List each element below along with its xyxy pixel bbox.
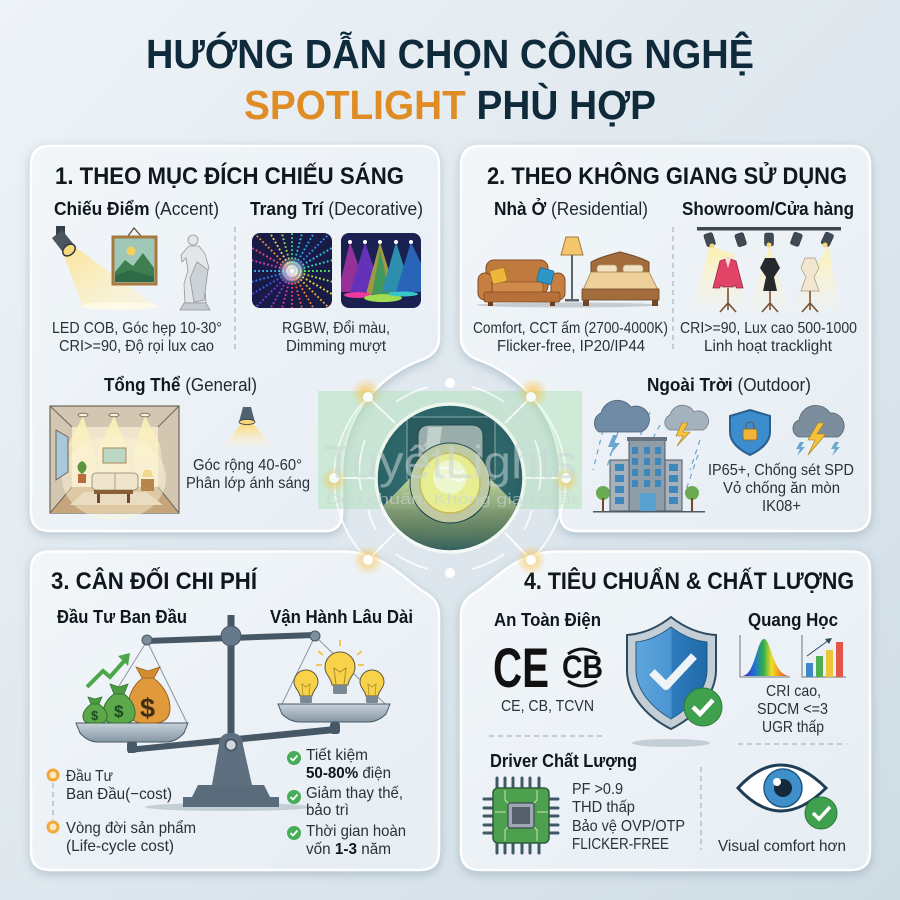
panel: 3. cost balance [31,552,439,870]
icon: eye with check [738,765,837,829]
icon: circuit chip [484,778,558,853]
icon: rainbow LED burst [252,233,332,308]
caption: decorative [282,319,390,355]
heading: 1. THEO MỤC ĐÍCH CHIẾU SÁNG [55,162,404,190]
caption: showroom [680,320,857,355]
heading: 3. CÂN ĐỐI CHI PHÍ [51,567,258,595]
caption: residential [473,320,668,355]
list: benefits with check icons: Giảm thay thế, [306,785,403,802]
subheading: driver quality: Driver Chất Lượng [490,751,637,771]
title: SPOTLIGHT PHÙ HỢP [244,82,656,128]
illustration: lit living room [50,406,179,520]
icon: security shield with padlock [730,410,770,455]
icon: statue [180,235,210,310]
caption: accent: CRI>=90, Độ rọi lux cao [59,338,214,355]
icon: money bags and growth arrow: $ [114,702,124,721]
illustration: balance scale [76,615,390,811]
caption: optics [757,683,828,736]
caption: driver specs: FLICKER-FREE [572,836,669,853]
list: benefits with check icons: bảo trì [306,802,349,819]
icon: shield with check [627,617,722,747]
panel: 4. standards and quality [461,552,870,870]
subheading: optics: Quang Học [748,610,838,630]
subheading: residential: Nhà Ở (Residential) [494,198,648,219]
caption: accent: LED COB, Góc hẹp 10-30° [52,320,222,337]
legend: cost points: Vòng đời sản phẩm [66,819,196,837]
chart: light spectrum [740,635,790,677]
list: benefits with check icons: 50-80% điện [306,765,391,782]
caption: decorative: RGBW, Đổi màu, [282,319,390,337]
icon: stage colour beams [338,233,424,308]
caption: optics: SDCM <=3 [757,701,828,718]
caption: showroom: CRI>=90, Lux cao 500-1000 [680,320,857,337]
title: HƯỚNG DẪN CHỌN CÔNG NGHỆ [146,31,754,77]
subheading: long-term operation: Vận Hành Lâu Dài [270,607,413,627]
caption: safety standards: CE, CB, TCVN [501,698,594,715]
caption: outdoor [708,462,854,515]
caption: outdoor: IP65+, Chống sét SPD [708,462,854,479]
caption: residential: Flicker-free, IP20/IP44 [497,338,645,355]
caption: driver specs [572,781,685,853]
caption: showroom: Linh hoạt tracklight [704,338,833,355]
legend: cost points: Ban Đầu(−cost) [66,786,172,803]
watermark: Đèn chuẩn. Không gian chất [326,491,578,508]
list: benefits with check icons: Tiết kiệm [306,747,368,764]
icon: CE and CB marks: CE [493,636,549,699]
icon: money bags and growth arrow: $ [140,693,155,723]
subheading: accent: Chiếu Điểm (Accent) [54,199,219,219]
caption: decorative: Dimming mượt [286,338,387,355]
legend: cost points: Đầu Tư [66,768,113,785]
subheading: electrical safety: An Toàn Điện [494,610,601,630]
icon: money bags and growth arrow: $ [91,708,99,723]
illustration: building in storm [593,400,709,512]
caption: driver specs: PF >0.9 [572,781,623,798]
panel: 1. lighting purpose [31,146,439,531]
icon: storm cloud with lightning [793,405,844,456]
caption: general: Góc rộng 40-60° [193,457,302,474]
panel: 2. usage space [461,146,870,531]
icon: money bags and growth arrow [83,653,170,723]
icon: track lights and mannequins [692,227,841,312]
list: benefits with check icons [287,747,406,858]
watermark backing [318,391,582,509]
caption: outdoor: IK08+ [762,498,801,515]
icon: light bulbs [294,640,384,703]
caption: general [186,457,310,492]
caption: accent [52,320,222,355]
subheading: outdoor: Ngoài Trời (Outdoor) [647,375,811,395]
caption: visual comfort: Visual comfort hơn [718,838,846,855]
subheading: decorative: Trang Trí (Decorative) [250,199,423,219]
icon: CE and CB marks: CB [562,649,603,685]
icon: framed picture [113,228,156,284]
caption: general: Phân lớp ánh sáng [186,475,310,492]
subheading: showroom: Showroom/Cửa hàng [682,199,854,219]
caption: driver specs: Bảo vệ OVP/OTP [572,818,685,835]
heading: 2. THEO KHÔNG GIANG SỬ DỤNG [487,161,847,190]
chart: rising bars [802,635,846,677]
caption: residential: Comfort, CCT ấm (2700-4000K) [473,320,668,337]
caption: optics: UGR thấp [762,719,824,736]
caption: optics: CRI cao, [766,683,821,700]
heading: 4. TIÊU CHUẨN & CHẤT LƯỢNG [524,567,854,595]
list: benefits with check icons: vốn 1-3 năm [306,841,391,858]
caption: driver specs: THD thấp [572,799,635,816]
title [146,31,754,128]
icon: sofa, lamp and bed [476,237,660,308]
icon: wide-angle spot [223,407,273,447]
subheading: initial investment: Đầu Tư Ban Đầu [57,607,187,627]
list: benefits with check icons: Thời gian hoàn [306,823,406,840]
central spotlight hub [321,378,579,578]
legend: cost points: (Life-cycle cost) [66,838,174,855]
subheading: general: Tổng Thể (General) [104,375,257,395]
watermark [318,391,582,509]
legend: cost points [48,768,196,855]
watermark: TuyếtLights [323,436,577,488]
caption: outdoor: Vỏ chống ăn mòn [723,480,840,497]
icon: spotlight beam [52,226,158,310]
